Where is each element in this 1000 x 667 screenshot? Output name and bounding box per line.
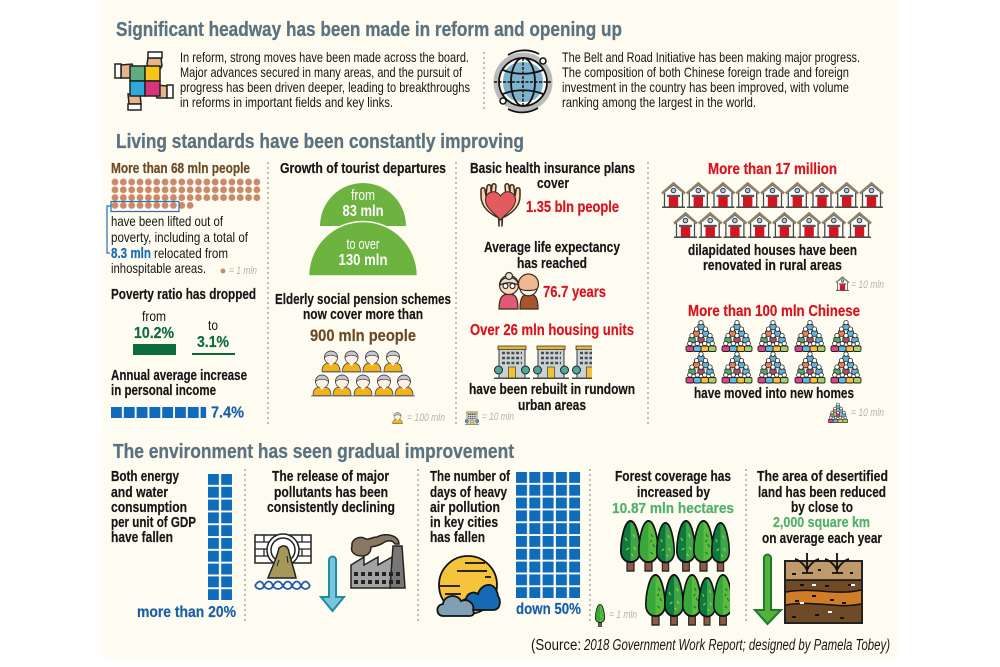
source note: (Source: [531,637,581,654]
text: energy consumption: and water [111,485,168,501]
text: rebuilt in urban areas [469,382,635,414]
text: renovated houses: dilapidated houses have been [688,243,857,259]
text: air pollution: has fallen [430,530,485,546]
text: air pollution [430,469,510,546]
chart: semicircles for tourist departures: to over [346,236,380,253]
chart: 7.4% squares: 7.4% [211,404,244,422]
text: renovated houses: renovated in rural areas [703,258,842,274]
pictogram: houses [662,184,883,238]
chart: semicircles for tourist departures: 83 mln [342,203,384,220]
heading: health insurance [470,161,635,192]
figure: more than 20%: more than 20% [137,604,236,621]
bar: from 10.2%: 10.2% [134,325,174,342]
panel: energy and water [111,469,236,621]
text: reform paragraph: progress has been driven deeper, leading to breakthroughs [180,79,470,95]
figure: 1.35 bln: 1.35 bln people [526,199,619,216]
heading: personal income: in personal income [111,383,216,399]
text: energy consumption [111,469,196,546]
text: air pollution: days of heavy [430,485,507,501]
text: desertified land: 2,000 square km [773,514,870,531]
heading: 100 mln Chinese: More than 100 mln Chinese [688,303,860,320]
heading: 17 million: More than 17 million [708,161,837,178]
text: desertified land: on average each year [762,531,882,547]
icon: sewage pipe [255,534,311,589]
bar: from 10.2% [133,308,176,355]
icon: soil layers [785,553,862,623]
text: energy consumption: consumption [111,500,187,516]
legend: building: = 10 mln [482,411,514,423]
legend: house [836,277,884,291]
text: belt and road paragraph [562,49,860,110]
heading: health insurance: cover [537,176,569,192]
text: pollutants: The release of major [272,469,389,485]
legend: tree [595,604,637,627]
source note [531,637,890,654]
text: lifted out of poverty: relocated from [154,245,228,261]
text: rebuilt in urban areas: have been rebuilt in rundown [469,382,635,398]
icon: heart in hands [481,184,520,226]
pictogram: elderly people [311,351,415,396]
panel: poverty reduction [107,161,261,422]
chart: semicircles for tourist departures [308,183,418,276]
text: new homes: have moved into new homes [694,386,854,402]
panel: tourism and pensions [275,161,451,424]
pictogram: trees [621,521,732,625]
heading: environment: The environment has seen gradual improvement [113,440,514,463]
text: desertified land: The area of desertified [757,469,888,485]
text: air pollution: in key cities [430,515,498,531]
text: pollutants [267,469,395,516]
text: energy consumption: have fallen [111,530,173,546]
icon: elderly couple [499,272,538,309]
figure: down 50%: down 50% [516,601,581,618]
text: rebuilt in urban areas: urban areas [518,398,586,414]
panel: heavy air pollution [430,469,581,618]
heading: life expectancy [484,240,620,272]
heading: pension schemes: Elderly social pension schemes [275,292,451,308]
bar: to 3.1% [192,317,235,355]
figure: 76.7 years: 76.7 years [543,284,606,301]
arrow: down [321,556,344,611]
heading: life expectancy: has reached [517,256,587,272]
panel: pollutants [255,469,405,611]
chart: semicircles for tourist departures: from [351,187,375,204]
chart: 7.4% squares [111,404,244,422]
pictogram: apartment buildings [494,346,592,379]
panel: desertified land [755,469,888,624]
text: belt and road paragraph: The composition of both Chinese foreign trade and foreign [562,64,849,80]
text: renovated houses [688,243,857,274]
heading: tourist departures: Growth of tourist departures [280,161,446,177]
heading: housing units: Over 26 mln housing units [470,322,634,339]
text: energy consumption: Both energy [111,469,179,485]
chart: squares [208,474,232,600]
bar: from 10.2%: from [142,308,166,324]
text: reform paragraph: In reform, strong moves have been made across the board. [180,49,469,65]
text: pollutants: pollutants has been [274,485,388,501]
arrow: down [755,554,781,624]
figure: 900 mln people: 900 mln people [310,326,416,345]
heading: pension schemes [275,292,451,323]
text: forest: 10.87 mln hectares [612,500,734,517]
icon: globe [494,50,552,112]
icon: factory [351,535,405,588]
legend: elderly [393,412,445,424]
heading: pension schemes: now cover more than [303,307,423,323]
text: reform paragraph [180,49,470,110]
source note: 2018 Government Work Report; designed by Pamela Tobey) [583,637,890,654]
text: reform paragraph: in reforms in important fields and key links. [180,94,393,110]
legend: dot [220,265,257,277]
icon: sun and clouds [437,556,500,616]
text: reform paragraph: Major advances secured in many areas, and the pursuit of [180,64,462,80]
chart: semicircles for tourist departures: 130 mln [338,252,388,269]
heading: poverty ratio: Poverty ratio has dropped [111,287,256,303]
text: belt and road paragraph: investment in the country has been improved, with volume [562,79,849,95]
panel: forest coverage [595,469,734,627]
text: air pollution: air pollution [430,500,500,516]
legend: tree: = 1 mln [609,609,637,621]
text: energy consumption: per unit of GDP [111,515,196,531]
icon: puzzle and hands [115,52,173,110]
text: lifted out of poverty: poverty, including a total of [111,229,248,245]
text: air pollution: The number of [430,469,510,485]
heading: personal income [111,368,247,399]
legend: dot: = 1 mln [229,265,257,277]
text: lifted out of poverty: have been lifted out of [111,213,223,229]
legend: elderly: = 100 mln [407,412,445,424]
heading: health insurance: Basic health insurance plans [470,161,635,177]
bracket: 8.3 mln highlight [107,202,179,253]
text: belt and road paragraph: The Belt and Road Initiative has been making major progress. [562,49,860,65]
text: desertified land: by close to [791,500,853,516]
bar: to 3.1%: 3.1% [197,334,229,351]
text: lifted out of poverty: inhospitable areas. [111,260,206,276]
chart: squares [516,472,580,598]
pictogram: people pyramids [686,320,861,383]
bar: to 3.1%: to [208,317,218,333]
text: lifted out of poverty [111,213,248,276]
text: forest [612,469,734,517]
text: pollutants: consistently declining [267,500,395,516]
text: lifted out of poverty: 8.3 mln [111,246,151,262]
panel: health and housing [465,161,635,425]
legend: building [465,411,514,425]
heading: reform and opening up: Significant headway has been made in reform and opening up [116,18,622,41]
panel: rural houses and new homes [662,161,884,423]
heading: living standards: Living standards have been constantly improving [116,130,524,153]
chart: dots for 68 mln [111,178,261,209]
text: forest: increased by [637,485,710,501]
heading: 68 mln: More than 68 mln people [111,161,250,177]
background panel [102,0,898,659]
text: belt and road paragraph: ranking among the largest in the world. [562,94,756,110]
legend: pyramid [828,403,884,423]
text: desertified land [757,469,888,547]
text: forest: Forest coverage has [615,469,731,485]
heading: life expectancy: Average life expectancy [484,240,620,256]
text: desertified land: land has been reduced [758,485,886,501]
heading: personal income: Annual average increase [111,368,247,384]
legend: house: = 10 mln [851,279,884,291]
legend: pyramid: = 10 mln [851,407,884,419]
